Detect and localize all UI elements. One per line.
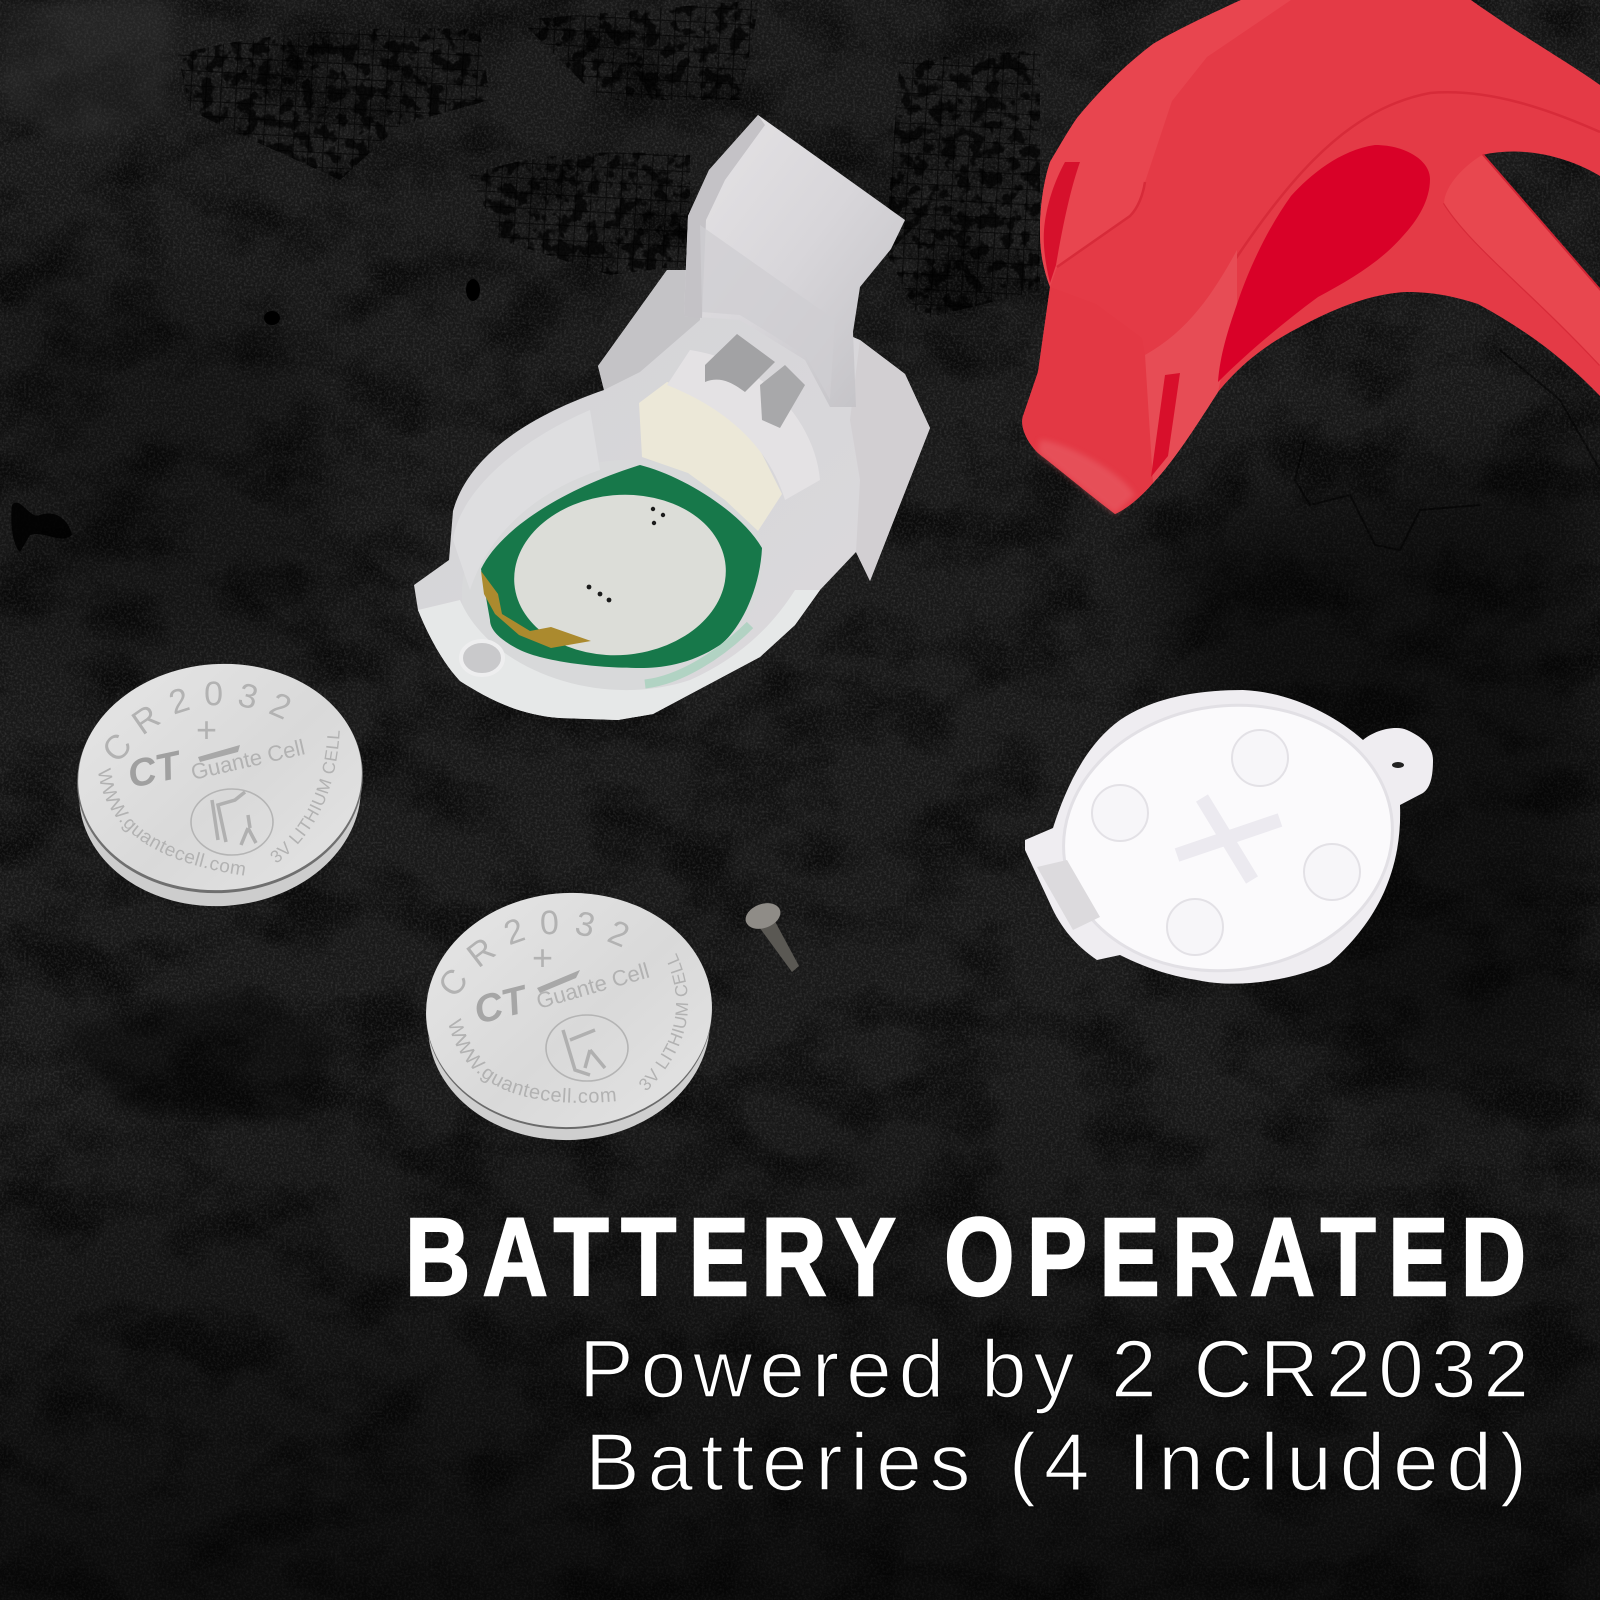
- left CR2032 coin battery: [77, 664, 363, 906]
- arm of clip: [684, 115, 905, 407]
- red silicone strap: [1022, 0, 1600, 514]
- center CR2032 coin battery: Guante Cell: [533, 958, 652, 1014]
- metal contact tab left: [705, 334, 775, 392]
- center CR2032 coin battery: WWW.guantecell.com: [449, 1018, 616, 1103]
- left CR2032 coin battery: WWW.guantecell.com: [98, 768, 245, 876]
- nose of strap: [1022, 287, 1153, 514]
- center CR2032 coin battery: 3V LITHIUM CELL: [639, 953, 688, 1090]
- small screw: [742, 899, 799, 972]
- see-through inner ring by arm: [667, 350, 820, 500]
- green tint in rim: [645, 625, 750, 684]
- front rim of tray: [418, 590, 820, 720]
- center CR2032 coin battery: CR2032: [441, 910, 628, 994]
- outer lighter band of strap: [1040, 0, 1291, 287]
- inner disc of cover: [1046, 684, 1410, 992]
- brass spring contact: [481, 571, 591, 648]
- center CR2032 coin battery: [426, 892, 712, 1140]
- right side wing: [850, 340, 930, 581]
- heading: BATTERY OPERATED: [405, 1197, 1526, 1319]
- clear body outline: [414, 270, 930, 720]
- slot left: [1044, 162, 1080, 283]
- raised circular pads: [1092, 730, 1360, 955]
- lanyard hole: [1392, 762, 1404, 768]
- lighter textured edge beside opening: [1145, 250, 1237, 483]
- slot bottom: [1151, 373, 1180, 477]
- subheading line 1: Powered by 2 CR2032: [579, 1324, 1529, 1415]
- pad via holes: [587, 507, 665, 602]
- silver contact pad on board: [507, 486, 733, 664]
- left wall of tray: [453, 410, 600, 590]
- screw post: [461, 641, 503, 675]
- white battery cover: [1025, 684, 1433, 992]
- green circuit board: [481, 465, 762, 668]
- highlight at tip of strap: [1038, 440, 1135, 514]
- arm lower shadow strip: [700, 225, 835, 400]
- center CR2032 coin battery: CT: [470, 978, 534, 1033]
- center CR2032 coin battery: +: [532, 937, 553, 978]
- strap groove lines: [1057, 92, 1600, 365]
- subheading line 2: Batteries (4 Included): [585, 1417, 1527, 1508]
- left CR2032 coin battery: CT: [124, 743, 187, 797]
- inner bowl of tray: [436, 429, 788, 731]
- left CR2032 coin battery: 3V LITHIUM CELL: [270, 730, 340, 862]
- metal contact tab right: [760, 365, 805, 428]
- arm side edge: [684, 115, 765, 318]
- left CR2032 coin battery: +: [196, 709, 217, 750]
- white battery clip block: [639, 382, 782, 531]
- left CR2032 coin battery: CR2032: [105, 681, 290, 759]
- upper left shoulder of housing: [598, 270, 700, 390]
- left CR2032 coin battery: Guante Cell: [189, 734, 307, 785]
- transparent device housing: [414, 115, 930, 731]
- cover cross emboss: [1177, 798, 1280, 880]
- right arm highlight: [1444, 155, 1600, 365]
- inner opening showing saturated red: [1218, 145, 1430, 382]
- tab of cover: [1037, 860, 1100, 930]
